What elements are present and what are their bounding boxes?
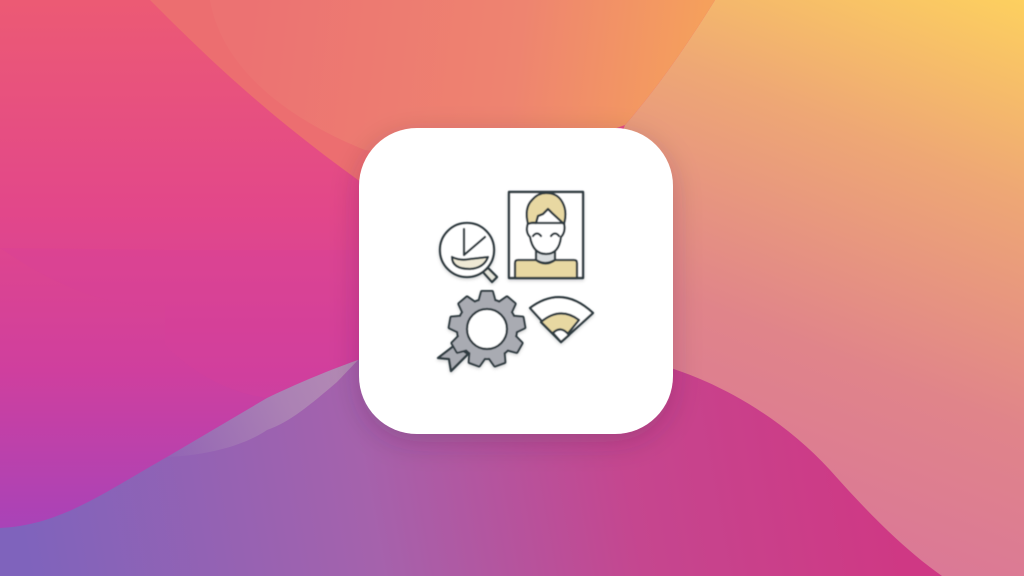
icon: gear with ribbon — [438, 292, 525, 371]
icon: magnifier with pie chart — [440, 223, 497, 282]
wave: orange top band — [210, 0, 715, 170]
wave: upper coral band — [150, 0, 715, 185]
white rounded card — [359, 128, 673, 434]
wave: bottom purple and pink sweep — [0, 330, 942, 576]
icon: wifi signal — [530, 297, 593, 342]
wave: left pink field — [0, 0, 715, 560]
icon: portrait in frame — [509, 192, 583, 278]
wave: faint lobe on left — [0, 248, 370, 399]
wave: translucent highlight ridge — [167, 360, 358, 457]
icon group — [438, 192, 593, 371]
